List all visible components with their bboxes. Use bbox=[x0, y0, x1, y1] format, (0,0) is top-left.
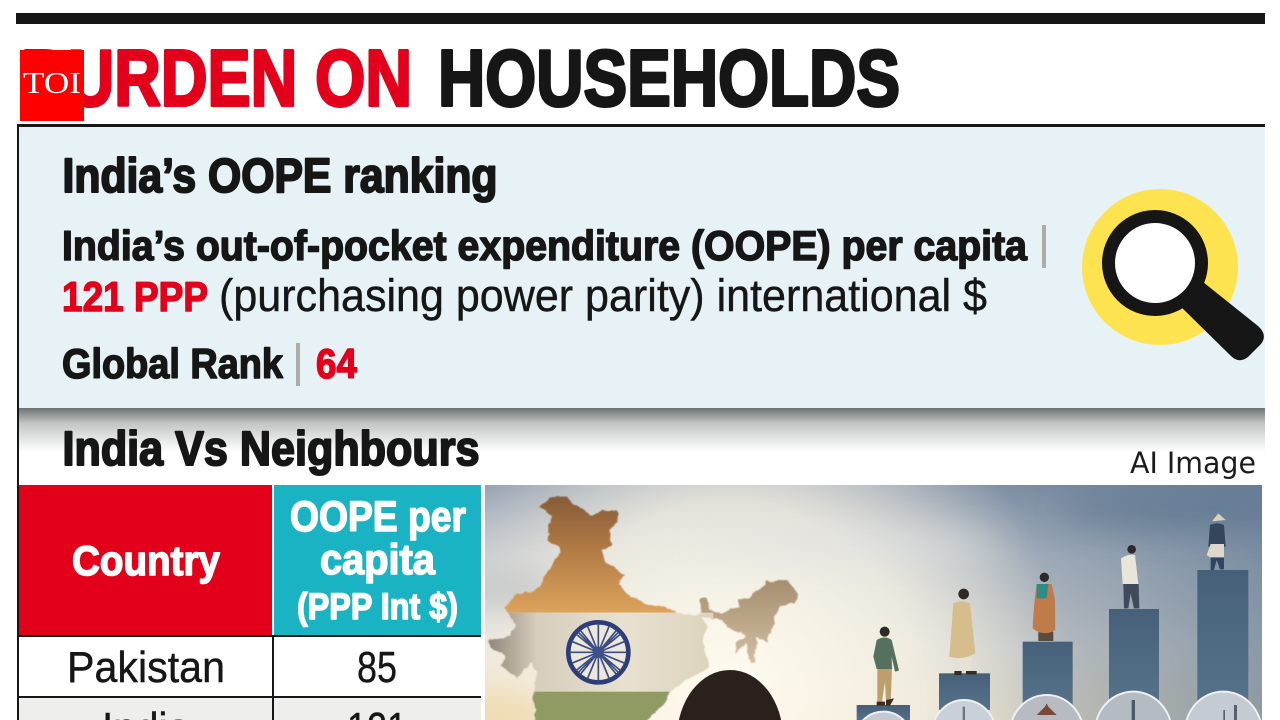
column 2 with person bbox=[932, 589, 996, 720]
heading: India's OOPE ranking: India’s OOPE ranking bbox=[62, 150, 498, 203]
column 4 with person bbox=[1095, 545, 1172, 720]
header cell: Country bbox=[19, 485, 272, 635]
title: HOUSEHOLDS bbox=[438, 34, 900, 122]
row: Pakistan bbox=[19, 637, 481, 696]
TOI logo badge bbox=[20, 50, 84, 121]
icon: magnifying glass bbox=[1082, 189, 1264, 360]
column 1 with person bbox=[855, 627, 912, 720]
top rule bbox=[16, 13, 1265, 24]
illustration: AI image of India map and people on rising columns bbox=[420, 485, 1280, 720]
TOI logo badge: TOI bbox=[23, 65, 81, 100]
header cell: OOPE per capita: OOPE per bbox=[290, 493, 466, 541]
text: global rank: 64 bbox=[316, 340, 358, 387]
column 3 with person bbox=[1010, 573, 1083, 720]
header cell: Country: Country bbox=[72, 537, 221, 584]
person: foreground head bbox=[677, 670, 783, 720]
title bbox=[21, 34, 900, 122]
text: global rank: Global Rank bbox=[62, 340, 284, 387]
heading: India Vs Neighbours: India Vs Neighbours bbox=[62, 423, 480, 476]
panel: India's OOPE ranking bbox=[19, 127, 1265, 408]
text: OOPE per capita: 121 PPP bbox=[62, 273, 208, 320]
header cell: OOPE per capita bbox=[274, 485, 481, 635]
table: India vs neighbours bbox=[19, 485, 481, 720]
row: Pakistan: 85 bbox=[357, 643, 397, 692]
header cell: OOPE per capita: (PPP Int $) bbox=[297, 586, 458, 627]
text: OOPE per capita bbox=[62, 222, 1046, 321]
text: OOPE per capita: India’s out-of-pocket expenditure (OOPE) per capita bbox=[62, 222, 1028, 269]
column 5 with person bbox=[1185, 513, 1262, 720]
title: BURDEN ON bbox=[21, 34, 412, 122]
row: Pakistan: Pakistan bbox=[67, 643, 225, 692]
caption: AI Image: AI Image bbox=[1130, 446, 1256, 480]
map of India in flag colours bbox=[488, 495, 798, 720]
header cell: OOPE per capita: capita bbox=[320, 536, 436, 584]
row: India bbox=[19, 698, 481, 720]
section shadow band bbox=[19, 408, 1265, 452]
text: OOPE per capita: (purchasing power parity) international $ bbox=[219, 270, 987, 321]
